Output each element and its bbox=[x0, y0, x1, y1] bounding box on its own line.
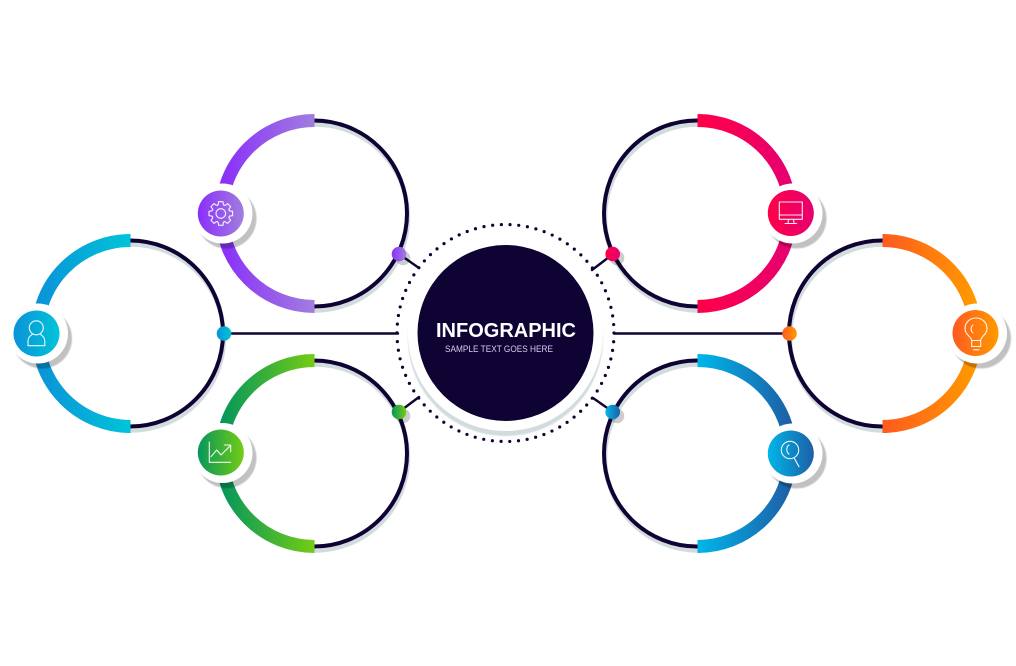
central hub bbox=[397, 224, 614, 442]
node: purple bbox=[392, 247, 410, 265]
ring: right orange bbox=[789, 240, 976, 430]
icon: growth chart bbox=[192, 423, 256, 488]
icon: person bbox=[8, 304, 72, 368]
connector lines bbox=[224, 254, 789, 412]
node: orange bbox=[782, 326, 797, 341]
ring: top-right red bbox=[604, 120, 791, 310]
node: blue bbox=[217, 326, 231, 341]
ring: bottom-right cyan bbox=[604, 360, 791, 550]
ring: left blue bbox=[37, 240, 224, 430]
icon: monitor bbox=[762, 184, 826, 248]
icon: magnifier bbox=[762, 424, 826, 488]
ring: top-left purple bbox=[221, 120, 408, 310]
subtitle: SAMPLE TEXT GOES HERE bbox=[445, 344, 553, 355]
node: red bbox=[605, 247, 624, 265]
icon: light bulb bbox=[947, 304, 1011, 368]
icon: gear bbox=[192, 184, 256, 248]
ring: bottom-left green bbox=[221, 360, 408, 550]
node: cyan bbox=[605, 405, 624, 423]
node: green bbox=[392, 405, 410, 423]
title: INFOGRAPHIC bbox=[436, 319, 576, 342]
